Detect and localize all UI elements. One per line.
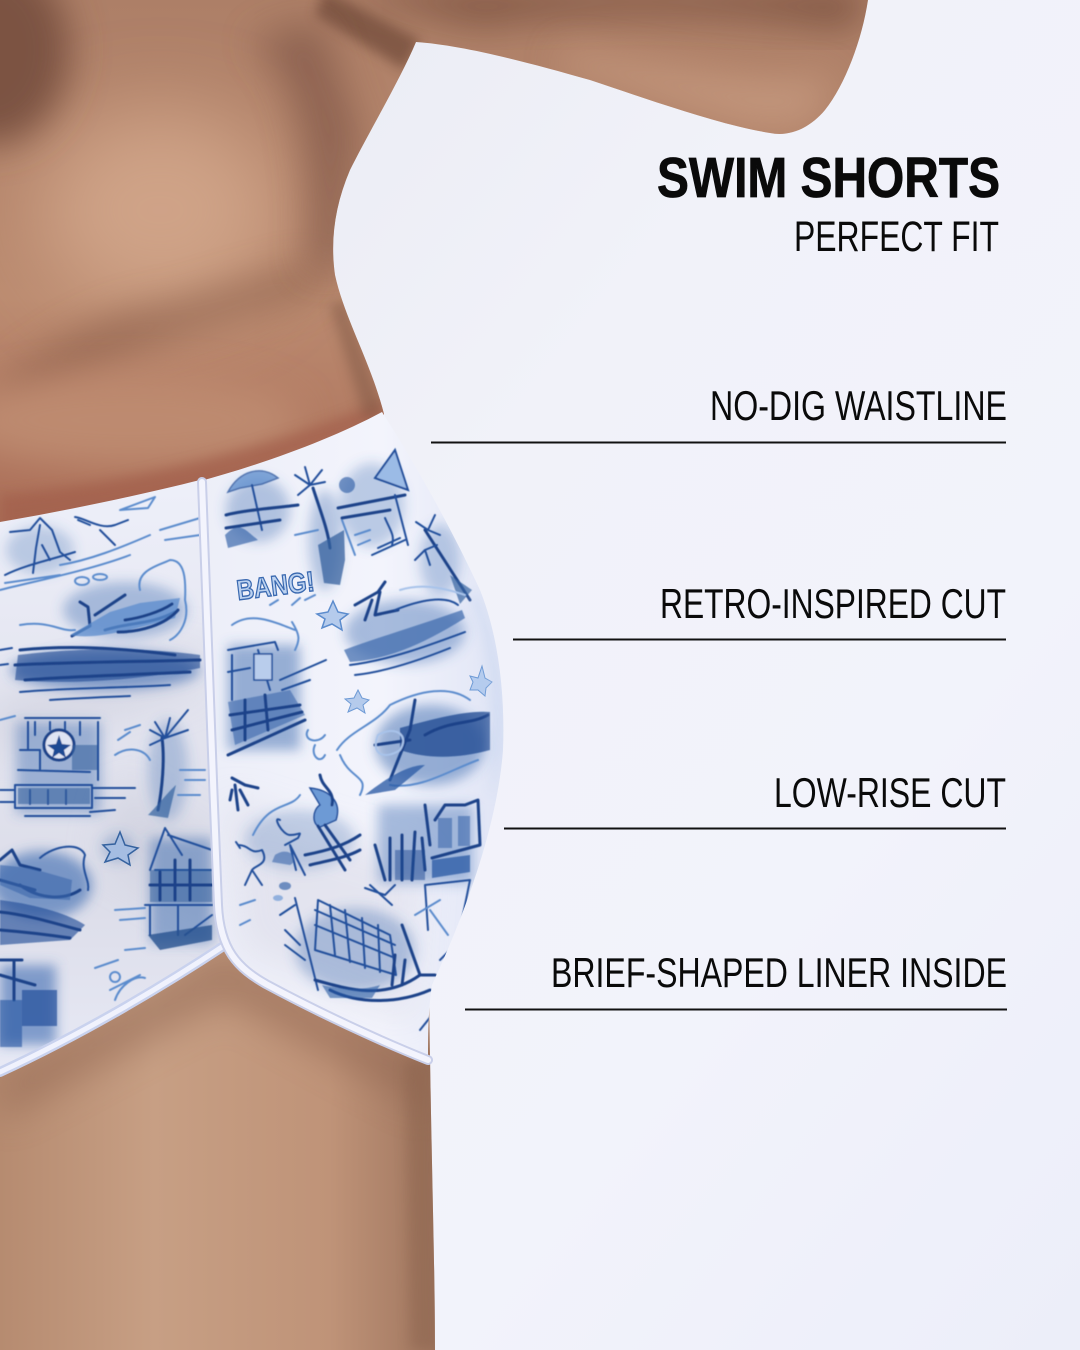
piping: side seam and hem [0,482,428,1072]
print: star two [345,690,369,713]
print: second palm tree [415,515,472,604]
print: starfish [103,832,138,865]
print: bottom building [0,960,145,1047]
ink wash: tonal mass of the print [0,526,212,1045]
swim shorts [0,405,510,1080]
print: crashing wave [337,691,490,795]
print: tower [115,828,212,950]
print: palm tree [148,710,205,818]
ink wash: tonal mass of the print [226,463,485,992]
print: brand lettering: BANG! [235,566,316,606]
subtitle: perfect fit: PERFECT FIT [794,213,999,261]
photo: leg [0,952,435,1350]
print: pebbles [272,728,448,1032]
panel: right shorts panel [206,412,504,1055]
print: beach tower [228,595,326,755]
print: volleyball net [240,898,448,1001]
print: umbrella and sea [225,471,298,548]
chest and abdomen shading [0,0,384,530]
print: runner and dog [0,497,200,590]
print: palm tree with trunk [295,467,355,585]
print: jet ski [20,560,186,640]
print: lifeguard building [0,716,150,816]
arm shading [315,0,870,125]
print: star one [317,601,348,630]
callout: low-rise cut: LOW-RISE CUT [774,769,1006,816]
print: star three [470,666,492,696]
print: second jet ski and wake [0,847,88,945]
heading [657,146,1000,261]
panel: left shorts panel [0,470,230,1080]
print: sea waves [0,648,200,700]
print: sailboat scene [336,447,410,557]
print: flamingos [230,775,360,885]
print: crowd [365,800,480,940]
print: speedboat [344,582,465,675]
photo: torso and arm [0,0,880,540]
title: swim shorts: SWIM SHORTS [657,146,1000,210]
